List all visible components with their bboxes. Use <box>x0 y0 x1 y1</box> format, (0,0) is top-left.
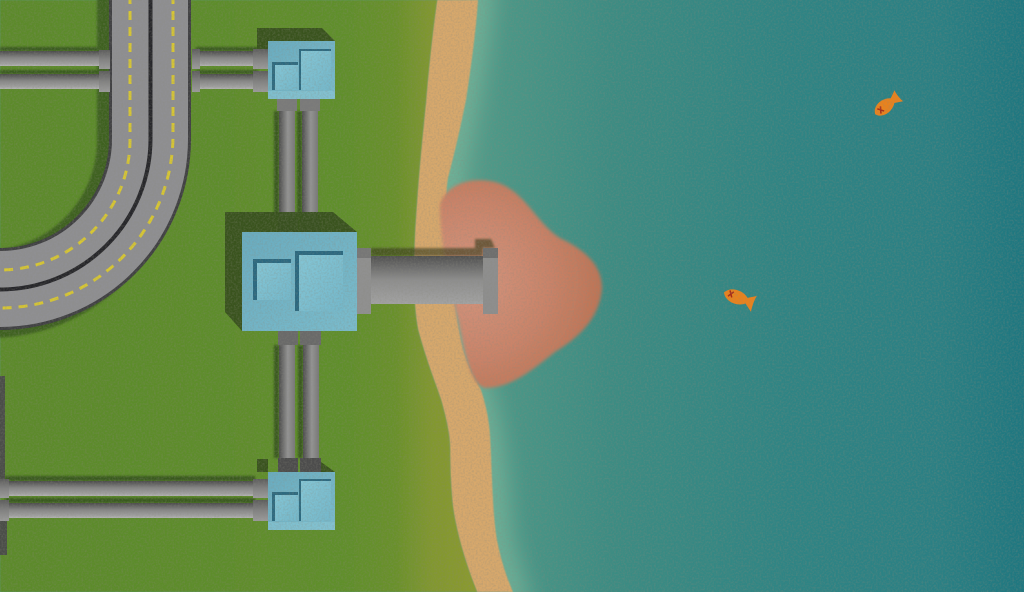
building: top pump station <box>257 28 335 99</box>
fish: lower left <box>721 285 757 312</box>
pipes: bottom horizontal <box>0 376 268 555</box>
pipes: top horizontal <box>0 47 268 92</box>
building: main treatment plant <box>225 212 357 331</box>
sand beach <box>414 0 513 592</box>
road shadow <box>0 0 118 339</box>
pipes: lower vertical <box>274 331 321 472</box>
pollution plume <box>440 180 602 388</box>
grass land <box>0 0 477 592</box>
fish: upper right <box>871 90 903 120</box>
pipes: upper vertical <box>274 99 320 232</box>
outfall pipe <box>357 239 498 314</box>
building: bottom pump station <box>257 459 335 530</box>
road <box>0 0 173 308</box>
